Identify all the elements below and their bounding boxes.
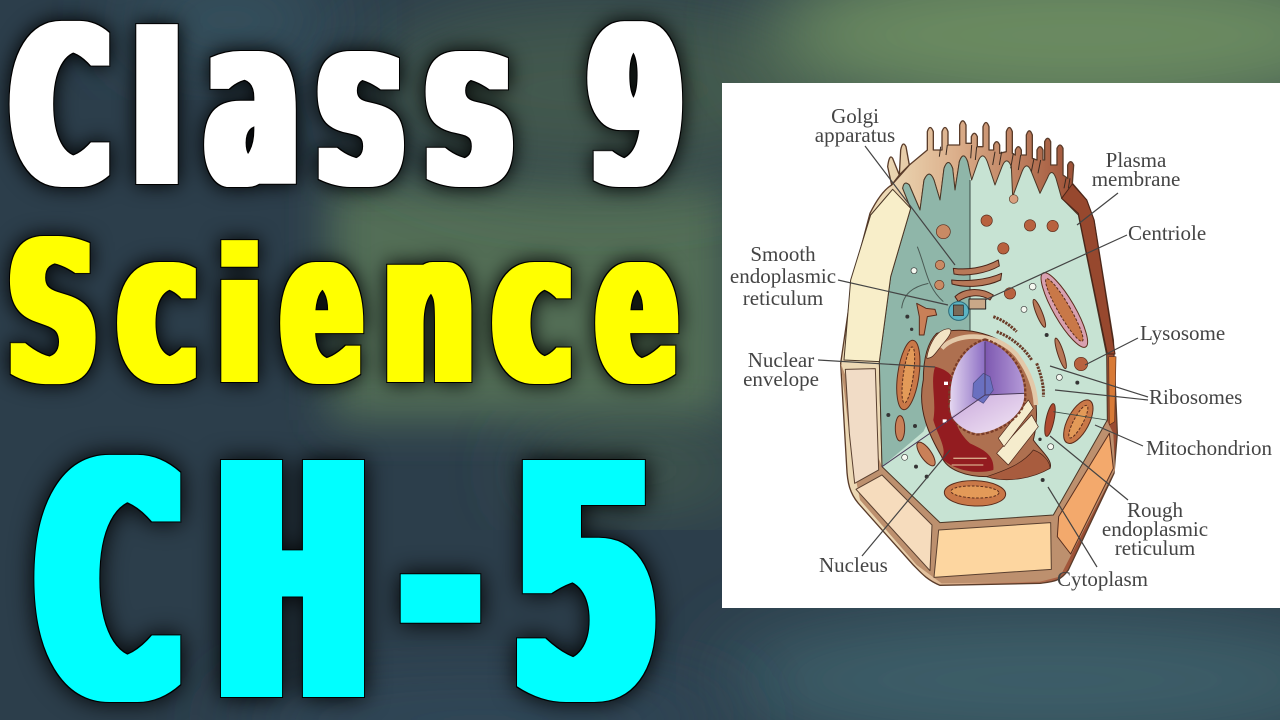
heading: Science: c — [493, 185, 573, 432]
wall panel: upper left — [844, 189, 911, 362]
centrioles — [949, 299, 986, 320]
leader lines — [818, 146, 1148, 567]
label: Cytoplasm: Cytoplasm — [1057, 567, 1148, 591]
heading: Science: e — [282, 185, 362, 432]
heading: Science: i — [218, 210, 262, 427]
outer cell wall and microvilli — [841, 121, 1117, 585]
granules and vesicles — [935, 215, 1088, 371]
wall panel: upper right — [1062, 184, 1115, 354]
mitochondria — [893, 268, 1099, 507]
label: Rough endoplasmic reticulum: reticulum — [1115, 536, 1195, 560]
panel: animal cell diagram — [722, 83, 1280, 608]
smooth endoplasmic reticulum — [902, 247, 943, 308]
label: Nuclear envelope: Nuclear — [748, 348, 814, 372]
label: Golgi apparatus: apparatus — [815, 123, 895, 147]
label: Ribosomes: Ribosomes — [1149, 385, 1242, 409]
label: Smooth endoplasmic reticulum: reticulum — [743, 286, 823, 310]
label: Nucleus: Nucleus — [819, 553, 888, 577]
white vesicles and ribosome dots — [887, 268, 1079, 482]
label: Plasma membrane: membrane — [1092, 167, 1180, 191]
label: Smooth endoplasmic reticulum: endoplasmic — [730, 264, 836, 288]
nucleus — [882, 341, 1024, 467]
lower right sector lines — [1053, 412, 1107, 420]
cytoplasm — [879, 156, 1107, 523]
label: Nuclear envelope: envelope — [743, 367, 819, 391]
wall panel: lower right — [1057, 433, 1113, 554]
heading: Science: c — [118, 185, 198, 432]
heading: Science: S — [8, 200, 98, 428]
heading: Science: e — [597, 185, 677, 432]
label: Plasma membrane: Plasma — [1106, 148, 1167, 172]
label: Mitochondrion: Mitochondrion — [1146, 436, 1272, 460]
cytoplasm: dark sector — [878, 155, 970, 466]
smooth ER body — [917, 303, 937, 335]
label: Rough endoplasmic reticulum: endoplasmic — [1102, 517, 1208, 541]
heading: Science: n — [384, 183, 474, 433]
lower wall base — [841, 363, 1115, 583]
rough endoplasmic reticulum — [993, 317, 1043, 397]
golgi apparatus — [952, 260, 1002, 302]
label: Centriole: Centriole — [1128, 221, 1206, 245]
nucleus envelope — [922, 329, 1051, 480]
label: Rough endoplasmic reticulum: Rough — [1127, 498, 1183, 522]
label: Golgi apparatus: Golgi — [831, 104, 879, 128]
label: Smooth endoplasmic reticulum: Smooth — [750, 242, 816, 266]
wall panel: right strip — [1109, 357, 1116, 425]
wall panel: lower left — [845, 369, 879, 483]
microvilli filaments — [939, 145, 1070, 188]
wall panel: bottom — [934, 523, 1051, 577]
apical vesicle — [1009, 195, 1018, 203]
cell illustration — [841, 121, 1117, 585]
wall panel: bottom left — [856, 475, 932, 571]
nucleolus — [973, 373, 993, 403]
label: Lysosome: Lysosome — [1140, 321, 1225, 345]
